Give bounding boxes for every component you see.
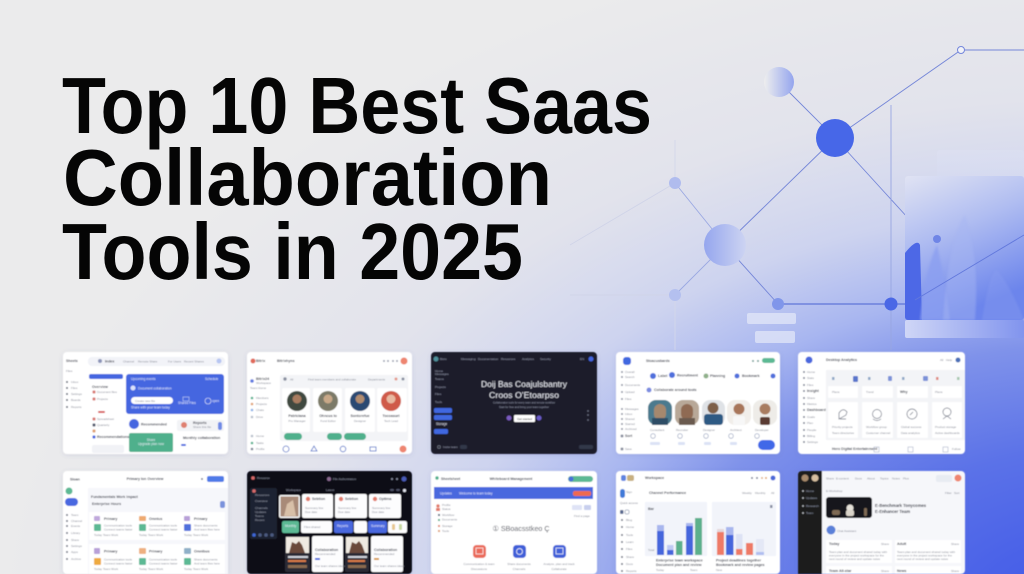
card 10: dark sidebar article feed: News — [897, 569, 906, 573]
logos and nav: Share — [626, 555, 634, 559]
card 3: dark landing page: Files — [435, 392, 442, 396]
card 10: dark sidebar article feed: E-Enhancer Team — [875, 509, 910, 514]
card 4: people gallery dashboard: Label — [658, 374, 667, 378]
card 3: dark landing page: Tools — [435, 400, 443, 404]
card 9: bar chart report: Workspace — [645, 476, 664, 480]
card 5: icon tile analytics board: Customer channel — [866, 431, 891, 435]
card 10: dark sidebar article feed — [798, 471, 965, 574]
card 6: workspace app directory: Omnibus — [194, 550, 210, 554]
card 2: team members directory — [247, 352, 412, 454]
card 2: team members directory: Projects — [256, 402, 267, 406]
card 8: banner page with three features: Welcome to team today — [459, 492, 493, 496]
title: Top 10 Best Saas — [62, 61, 652, 150]
card 10: dark sidebar article feed: E-Workshop — [826, 489, 843, 493]
card 8: banner page with three features: Communication & team — [463, 562, 495, 566]
card 1: blue workspace dashboard: Projects — [97, 397, 108, 401]
card 5: icon tile analytics board: Insight — [807, 389, 820, 393]
card 3: dark landing page: Projects — [435, 385, 446, 389]
card 7: dark mosaic dashboard: Summary line — [372, 506, 391, 510]
card 5: icon tile analytics board: Settings — [807, 440, 818, 444]
card 6: workspace app directory: Today — [184, 567, 193, 571]
card 4: people gallery dashboard: Bookmark — [742, 374, 760, 378]
card 1: blue workspace dashboard: Index — [105, 360, 114, 364]
card 4: people gallery dashboard: Recruiter — [676, 428, 688, 432]
card 2: team members directory: Fund Editor — [320, 419, 336, 423]
card 10: dark sidebar article feed: Research — [806, 504, 819, 508]
card 1: blue workspace dashboard: Sheets — [66, 359, 78, 363]
card 6: workspace app directory: Channel — [71, 519, 83, 523]
card 6: workspace app directory: Enterprise Hours — [92, 502, 121, 506]
card 3: dark landing page: Invite team — [443, 445, 458, 449]
card 2: team members directory: Find team members and collaborate — [308, 378, 356, 382]
title: Collaboration — [63, 133, 552, 222]
card 1: blue workspace dashboard — [63, 352, 228, 454]
card 5: icon tile analytics board: Home — [807, 370, 815, 374]
card 5: icon tile analytics board: Plan — [807, 421, 813, 425]
card 10: dark sidebar article feed: E-Benchmark Tonycomes — [875, 503, 927, 508]
card 1: blue workspace dashboard: Recent Shares — [184, 360, 204, 364]
card 8: banner page with three features: ① SBoacsstkeo Ç — [492, 524, 550, 533]
card 6: workspace app directory: Communication tools — [149, 524, 178, 528]
card 7: dark mosaic dashboard: Summary — [371, 524, 385, 528]
card 6: workspace app directory: Omnius — [149, 517, 162, 521]
chart panel backdrop — [937, 150, 1024, 320]
card 10: dark sidebar article feed: Team — [806, 511, 814, 515]
card 6: workspace app directory: And team files here — [194, 528, 220, 532]
card 2: team members directory: All — [290, 378, 294, 382]
logos and nav — [620, 475, 638, 573]
card 7: dark mosaic dashboard: Our team shares ideas — [315, 564, 346, 568]
card 2: team members directory: Home — [256, 434, 264, 438]
card 1: blue workspace dashboard: Spreadsheet — [97, 417, 114, 421]
card 4: people gallery dashboard: Designer — [703, 428, 715, 432]
card 9: bar chart report: New — [716, 568, 723, 572]
card 1: blue workspace dashboard: Recommended — [141, 422, 167, 426]
card 5: icon tile analytics board: Stats — [807, 376, 814, 380]
logos and nav: Reports — [626, 569, 637, 573]
card 6: workspace app directory: Archive — [71, 557, 81, 561]
card 4: people gallery dashboard — [616, 352, 780, 454]
card 9: bar chart report: All — [771, 491, 775, 495]
card 3: dark landing page: EN — [580, 357, 584, 361]
card 9: bar chart report: Channel Performance — [649, 491, 686, 495]
card 5: icon tile analytics board: Active dashboards — [935, 431, 960, 435]
card 6: workspace app directory: Team — [71, 513, 79, 517]
card 4: people gallery dashboard: Search — [625, 375, 635, 379]
card 9: bar chart report: Weekly — [742, 491, 752, 495]
card 8: banner page with three features: Updates — [440, 492, 452, 496]
card 10: dark sidebar article feed: About — [867, 476, 875, 480]
card 9: bar chart report: Team — [690, 568, 698, 572]
small network nodes — [669, 46, 964, 310]
card 2: team members directory: Chats — [256, 408, 264, 412]
network connector lines — [570, 50, 1024, 350]
card 7: dark mosaic dashboard: Optima — [379, 497, 392, 501]
card 3: dark landing page: Documentation — [478, 357, 499, 361]
card 8: banner page with three features — [431, 471, 597, 574]
card 1: blue workspace dashboard: Reports — [193, 421, 207, 425]
card 5: icon tile analytics board: All — [940, 358, 944, 362]
card 5: icon tile analytics board: Goals — [807, 415, 815, 419]
card 1: blue workspace dashboard: Settings — [71, 392, 82, 396]
card 6: workspace app directory: Share — [71, 538, 79, 542]
card 3: dark landing page: Messaging — [461, 357, 476, 361]
card 7: dark mosaic dashboard: Summary line — [305, 506, 324, 510]
card 10: dark sidebar article feed: next round of review and update notes — [897, 557, 949, 561]
card 6: workspace app directory: Team Work — [148, 533, 164, 537]
card 8: banner page with three features: Discussions — [471, 567, 487, 571]
card 10: dark sidebar article feed: Sort — [954, 491, 960, 495]
card 9: bar chart report: Document plan and review — [656, 563, 702, 567]
card 4: people gallery dashboard: Planning — [710, 374, 725, 378]
card 6: workspace app directory: Sloan — [70, 478, 80, 482]
card 3: dark landing page: Get started — [517, 417, 532, 421]
card 7: dark mosaic dashboard: Due date — [305, 510, 318, 514]
card 8: banner page with three features: Analyze, plan and track — [543, 562, 575, 566]
card 6: workspace app directory: Primary — [104, 550, 117, 554]
card 10: dark sidebar article feed: Docs — [855, 476, 862, 480]
card 9: bar chart report: Today — [656, 568, 665, 572]
card 10: dark sidebar article feed: Team plan and document shared today with — [829, 550, 887, 554]
card 9: bar chart report: Total — [648, 548, 655, 552]
card 8: banner page with three features: Profile — [442, 503, 451, 507]
card 4: people gallery dashboard: Starred — [625, 422, 635, 426]
card 7: dark mosaic dashboard: Summary line — [338, 506, 357, 510]
card 1: blue workspace dashboard: Recommendations — [97, 435, 129, 439]
card 1: blue workspace dashboard: Channel — [123, 360, 135, 364]
card 2: team members directory: Members — [256, 396, 269, 400]
logos and nav: Docs — [626, 562, 633, 566]
card 9: bar chart report: Enterprise team workspace — [656, 558, 703, 562]
card 9: bar chart report: Project deadlines together — [716, 558, 762, 562]
card 2: team members directory: Drive — [256, 415, 263, 419]
logos and nav: Home — [626, 525, 634, 529]
card 8: banner page with three features: Workflow — [442, 513, 455, 517]
card 5: icon tile analytics board: Billing — [807, 434, 815, 438]
logos and nav: Blog — [626, 518, 632, 522]
card 6: workspace app directory: Communication tools — [104, 524, 133, 528]
card 6: workspace app directory: Today — [94, 567, 103, 571]
card 7: dark mosaic dashboard: Recommended — [374, 552, 395, 556]
card 10: dark sidebar article feed: E-content — [836, 476, 849, 480]
card 6: workspace app directory: Share documents — [194, 558, 218, 562]
card 6: workspace app directory: Today — [139, 567, 148, 571]
card 9: bar chart report — [616, 471, 780, 574]
card 6: workspace app directory: And team files here — [194, 562, 220, 566]
card 8: banner page with three features: Tools — [442, 529, 450, 533]
bar chart left — [657, 518, 702, 555]
card 6: workspace app directory — [63, 471, 228, 574]
logos and nav: Learn — [626, 540, 634, 544]
card 7: dark mosaic dashboard: Resource — [257, 476, 270, 480]
card 9: bar chart report: Monthly — [755, 491, 766, 495]
card 8: banner page with three features: Channels — [513, 567, 526, 571]
card 4: people gallery dashboard: Architect — [730, 428, 742, 432]
card 6: workspace app directory: Settings — [71, 544, 82, 548]
card 1: blue workspace dashboard: Boards — [71, 398, 81, 402]
card 7: dark mosaic dashboard: Recent — [255, 518, 265, 522]
card 1: blue workspace dashboard: open — [212, 399, 219, 403]
card 8: banner page with three features: Share documents — [507, 562, 531, 566]
card 7: dark mosaic dashboard: Resources — [255, 493, 270, 497]
card 5: icon tile analytics board: Plans — [832, 390, 840, 394]
card 10: dark sidebar article feed: Share — [881, 569, 889, 573]
card 5: icon tile analytics board: Product storage — [935, 425, 957, 429]
card 5: icon tile analytics board: Global success — [901, 425, 922, 429]
card 6: workspace app directory: Connect teams faster — [149, 562, 178, 566]
card 4: people gallery dashboard: Recruitment — [677, 374, 699, 378]
card 1: blue workspace dashboard: Upgrade plan now — [138, 442, 165, 446]
medium sphere node — [704, 224, 746, 266]
card 3: dark landing page: Teams — [435, 377, 444, 381]
card 1: blue workspace dashboard: Upcoming events — [131, 377, 156, 381]
card 5: icon tile analytics board: Desktop Analytics — [826, 358, 857, 362]
card 8: banner page with three features: Find a page — [574, 514, 590, 518]
card 4: people gallery dashboard: Upload — [625, 390, 635, 394]
card 6: workspace app directory: Today — [139, 533, 148, 537]
card 3: dark landing page — [431, 352, 597, 454]
card 4: people gallery dashboard: Files — [625, 397, 632, 401]
card 6: workspace app directory: Connect teams faster — [104, 528, 133, 532]
card 10: dark sidebar article feed: Topics — [880, 476, 889, 480]
card 6: workspace app directory: Communication tools — [104, 558, 133, 562]
network graph illustration — [570, 46, 1024, 350]
card 10: dark sidebar article feed: next round of review and update notes — [829, 557, 881, 561]
card 10: dark sidebar article feed: Team plan and document shared today with — [897, 550, 955, 554]
card 5: icon tile analytics board: Metrics — [807, 402, 817, 406]
card 7: dark mosaic dashboard: Channels — [255, 506, 268, 510]
card 3: dark landing page: Collaboration tools for every team and remote workflow — [493, 400, 556, 404]
card 4: people gallery dashboard: Shared — [625, 417, 635, 421]
card 6: workspace app directory: Today — [94, 533, 103, 537]
card 10: dark sidebar article feed: Adult — [897, 542, 907, 546]
card 2: team members directory: Tasks — [256, 441, 264, 445]
card 4: people gallery dashboard: Save — [625, 447, 632, 451]
card 5: icon tile analytics board: Follow — [952, 447, 962, 451]
card 6: workspace app directory: Connect teams faster — [149, 528, 178, 532]
card 2: team members directory: Bitrix24 — [256, 377, 269, 381]
card 5: icon tile analytics board: Data analytics — [901, 431, 920, 435]
card 1: blue workspace dashboard: Quarterly — [97, 423, 110, 427]
card 7: dark mosaic dashboard: Teams — [255, 514, 264, 518]
card 3: dark landing page: Analytics — [522, 357, 535, 361]
card 10: dark sidebar article feed: Team All-star — [829, 569, 852, 573]
card 1: blue workspace dashboard: Document files — [97, 390, 117, 394]
card 7: dark mosaic dashboard: Collaboration — [374, 548, 397, 552]
card 1: blue workspace dashboard: Files — [66, 369, 73, 373]
card 5: icon tile analytics board: People — [807, 428, 817, 432]
card 7: dark mosaic dashboard: File Authorization — [333, 477, 356, 481]
card 5: icon tile analytics board: Priority projects — [832, 425, 853, 429]
card 2: team members directory: Team Home — [250, 386, 267, 390]
dashboard thumbnails grid — [63, 352, 965, 574]
card 6: workspace app directory: Connect teams faster — [104, 562, 133, 566]
card 2: team members directory: Pro Manager — [288, 419, 306, 423]
card 6: workspace app directory: Team Work — [103, 533, 119, 537]
card 10: dark sidebar article feed: Home — [806, 489, 814, 493]
card 10: dark sidebar article feed: everyone in the project workspace for the — [829, 554, 884, 558]
card 2: team members directory: Tech Lead — [384, 419, 398, 423]
card 9: bar chart report: Bookmark and review pages — [716, 563, 765, 567]
card 1: blue workspace dashboard: Create new file — [135, 399, 155, 403]
card 7: dark mosaic dashboard: Collaboration — [315, 548, 338, 552]
card 10: dark sidebar article feed: Share — [826, 476, 834, 480]
card 7: dark mosaic dashboard: Updates — [255, 510, 267, 514]
card 1: blue workspace dashboard: Monthly collaboration — [183, 436, 220, 440]
card 3: dark landing page: Bitrix — [440, 357, 447, 361]
card 5: icon tile analytics board: Trend — [866, 390, 874, 394]
card 2: team members directory: Tocoasuri — [383, 414, 399, 418]
card 3: dark landing page: Croos O'Etoarpso — [489, 391, 560, 400]
card 10: dark sidebar article feed: Share — [951, 569, 959, 573]
card 7: dark mosaic dashboard: Due date — [372, 510, 385, 514]
card 7: dark mosaic dashboard: Recommended — [315, 552, 336, 556]
card 5: icon tile analytics board: Dashboard — [807, 408, 826, 412]
card 6: workspace app directory: Team Work — [148, 567, 164, 571]
card 5: icon tile analytics board: Team directories — [832, 431, 855, 435]
card 1: blue workspace dashboard: Schedule — [205, 377, 219, 381]
card 2: team members directory: Bitrixhyns — [277, 359, 295, 363]
card 1: blue workspace dashboard: Reports — [71, 405, 82, 409]
card 4: people gallery dashboard: Overall — [625, 370, 635, 374]
card 7: dark mosaic dashboard: Latest — [326, 488, 334, 492]
card 5: icon tile analytics board: Why — [900, 390, 908, 394]
logos and nav: Quick access — [620, 501, 638, 505]
decorative pills — [747, 313, 796, 343]
card 1: blue workspace dashboard: Share — [147, 438, 155, 442]
card 10: dark sidebar article feed: Today — [829, 542, 839, 546]
card 6: workspace app directory: Primary — [194, 517, 207, 521]
title: Tools in 2025 — [62, 207, 523, 296]
card 10: dark sidebar article feed: Share — [881, 542, 889, 546]
card 8: banner page with three features: Whiteboard Management — [490, 477, 533, 481]
card 2: team members directory: Designer — [354, 419, 366, 423]
card 7: dark mosaic dashboard: Overview — [255, 499, 268, 503]
pale sphere node — [764, 67, 794, 97]
card 4: people gallery dashboard: Archived — [625, 427, 637, 431]
card 6: workspace app directory: Primary — [149, 550, 162, 554]
card 1: blue workspace dashboard: Remote Share — [138, 360, 158, 364]
card 3: dark landing page: Messages — [435, 372, 449, 376]
card 7: dark mosaic dashboard: Due date — [338, 510, 351, 514]
card 6: workspace app directory: Apps — [71, 550, 78, 554]
card 4: people gallery dashboard: Sort — [625, 434, 633, 438]
card 6: workspace app directory: Primary Ion Overview — [127, 477, 164, 481]
card 4: people gallery dashboard: Collaborate around tools — [654, 388, 697, 392]
card 7: dark mosaic dashboard — [247, 471, 412, 574]
card 8: banner page with three features: Status — [442, 507, 451, 511]
card 8: banner page with three features: Collaborate — [551, 567, 567, 571]
card 3: dark landing page: Start for free and bring your team together — [499, 405, 549, 409]
card 3: dark landing page: Storage — [436, 422, 447, 426]
card 2: team members directory: Profile — [256, 447, 265, 451]
card 5: icon tile analytics board: Workflow group — [866, 425, 887, 429]
card 3: dark landing page: Security — [540, 357, 551, 361]
logos and nav: Sign — [626, 490, 632, 494]
card 6: workspace app directory: Team Work — [103, 567, 119, 571]
card 10: dark sidebar article feed: Updates — [806, 496, 818, 500]
card 1: blue workspace dashboard: Overview — [92, 385, 108, 389]
card 7: dark mosaic dashboard: Sebtion — [312, 497, 325, 501]
card 1: blue workspace dashboard: Document collaboration — [138, 386, 172, 390]
card 6: workspace app directory: Primary — [104, 517, 117, 521]
card 6: workspace app directory: Team Work — [193, 567, 209, 571]
card 6: workspace app directory: Events — [71, 524, 81, 528]
card 10: dark sidebar article feed: Share — [951, 542, 959, 546]
card 8: banner page with three features: Storage — [442, 524, 453, 528]
card 10: dark sidebar article feed: Chat Assistant — [837, 529, 856, 533]
card 7: dark mosaic dashboard: Sebtion — [345, 497, 358, 501]
card 10: dark sidebar article feed: everyone in the project workspace for the — [897, 554, 952, 558]
card 7: dark mosaic dashboard: Monthly — [285, 524, 297, 528]
card 7: dark mosaic dashboard: Workspace — [286, 488, 301, 492]
bar chart right — [717, 527, 764, 555]
card 6: workspace app directory: Share documents — [194, 524, 218, 528]
chart panel — [905, 176, 1024, 338]
card 2: team members directory: Ohncus Io — [319, 414, 338, 418]
card 6: workspace app directory: Today — [184, 533, 193, 537]
card 1: blue workspace dashboard: Inbox — [71, 380, 79, 384]
card 4: people gallery dashboard: Messages — [625, 407, 639, 411]
card 7: dark mosaic dashboard: Our team shares ideas — [374, 564, 405, 568]
card 2: team members directory: Workspace — [256, 381, 271, 385]
card 6: workspace app directory: Fundamentals Work Impact — [91, 495, 139, 499]
card 5: icon tile analytics board — [798, 352, 965, 454]
card 1: blue workspace dashboard: Shared Files — [178, 401, 196, 405]
card 4: people gallery dashboard: Developer — [755, 428, 769, 432]
card 8: banner page with three features: Documents — [442, 518, 458, 522]
card 3: dark landing page: Resources — [501, 357, 516, 361]
card 4: people gallery dashboard: Consultant — [650, 428, 665, 432]
card 2: team members directory: Sontorefue — [351, 414, 369, 418]
card 2: team members directory: Departments — [368, 378, 386, 382]
card 6: workspace app directory: Library — [71, 531, 81, 535]
card 5: icon tile analytics board: Files — [807, 383, 814, 387]
card 4: people gallery dashboard: Stoacusbards — [646, 359, 670, 363]
card 10: dark sidebar article feed: Filter — [945, 491, 952, 495]
title — [62, 61, 652, 296]
card 5: icon tile analytics board: Help — [946, 358, 953, 362]
card 8: banner page with three features: Sheetsheet — [441, 477, 461, 481]
card 2: team members directory: Bitrix — [256, 359, 265, 363]
card 10: dark sidebar article feed: Notes — [892, 476, 900, 480]
card 5: icon tile analytics board: Share — [807, 396, 815, 400]
card 1: blue workspace dashboard: Share with your team today — [131, 406, 170, 410]
card 10: dark sidebar article feed: Plus — [903, 476, 909, 480]
card 7: dark mosaic dashboard: Reports — [337, 524, 349, 528]
card 5: icon tile analytics board: Plans — [935, 390, 943, 394]
card 6: workspace app directory: Team Work — [193, 533, 209, 537]
card 1: blue workspace dashboard: Share this file — [193, 425, 212, 429]
card 4: people gallery dashboard: Documents — [625, 383, 641, 387]
card 3: dark landing page: Home — [435, 369, 443, 373]
logos and nav: Files — [626, 547, 633, 551]
card 6: workspace app directory: Communication tools — [149, 558, 178, 562]
card 5: icon tile analytics board: Hero Digital Entertainment — [832, 447, 878, 451]
card 1: blue workspace dashboard: Files — [71, 386, 78, 390]
card 4: people gallery dashboard: Inbox — [625, 412, 633, 416]
card 9: bar chart report: Bar — [648, 507, 655, 511]
logos and nav: Tools — [626, 533, 634, 537]
card 2: team members directory: Patriciana — [288, 414, 307, 418]
large blue hub node — [816, 119, 854, 157]
card 3: dark landing page: Doij Bas Coajulsbantry — [481, 380, 567, 389]
card 1: blue workspace dashboard: For Users — [168, 360, 182, 364]
card 7: dark mosaic dashboard: Files shared — [304, 525, 321, 529]
